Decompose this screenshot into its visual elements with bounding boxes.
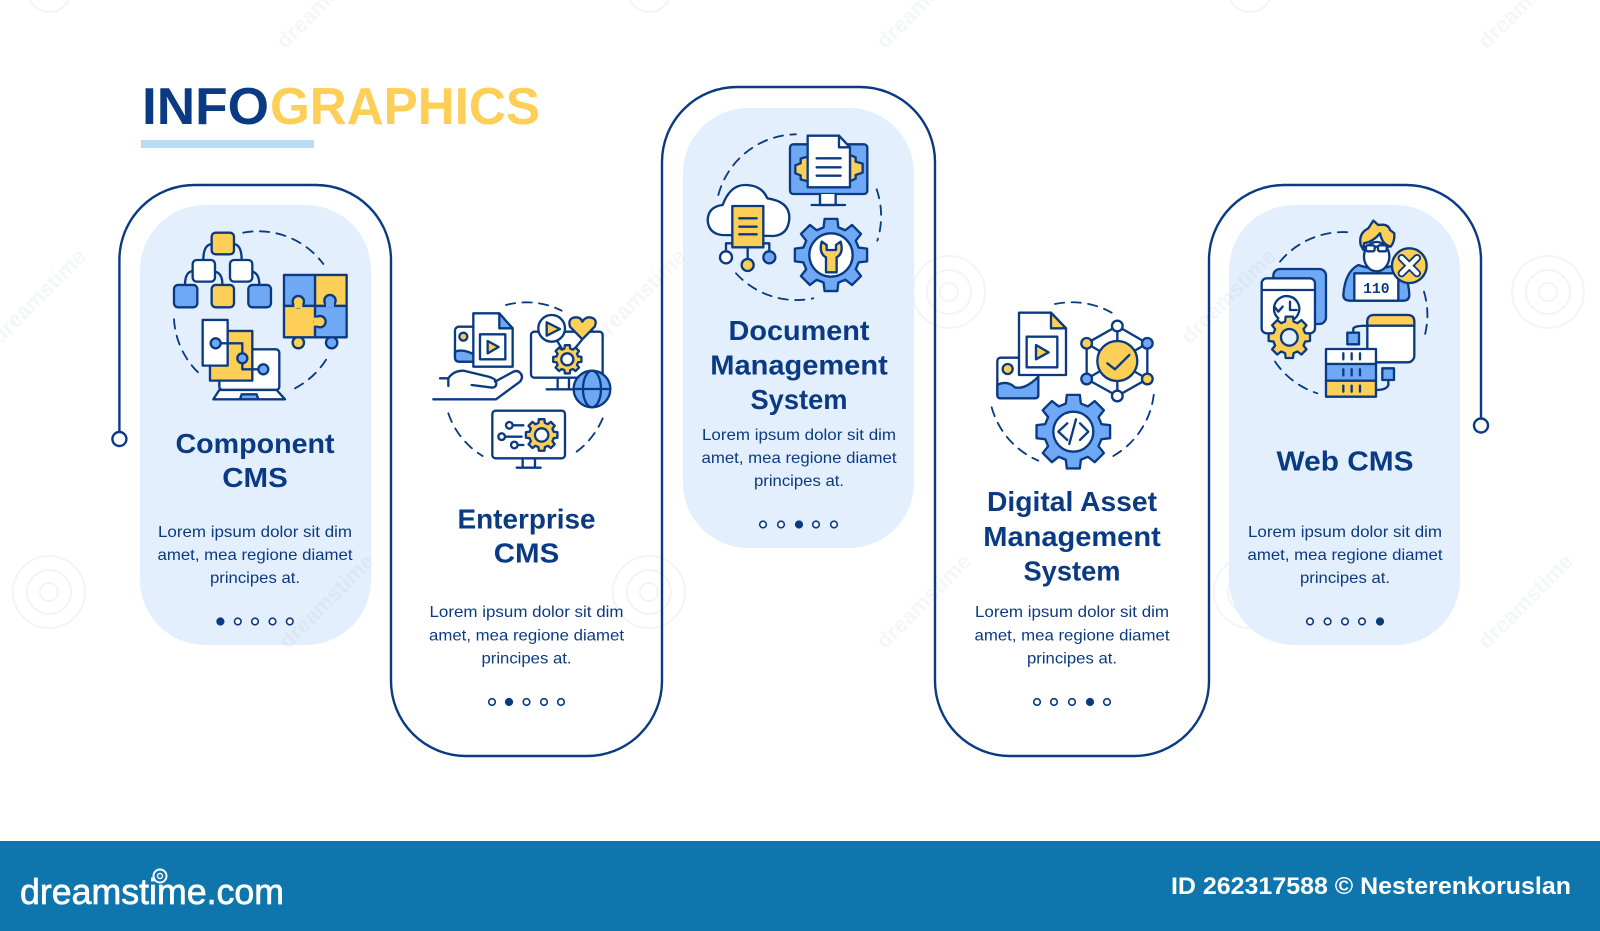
heading: Enterprise CMS (458, 504, 596, 569)
pagination dots: step 1 (217, 618, 293, 625)
panel: document background (683, 108, 914, 548)
watermark text (0, 0, 1578, 654)
text: web description: Lorem ipsum dolor sit dim (1248, 524, 1442, 541)
watermark text: dreamstime (1176, 244, 1281, 349)
title: INFO (142, 78, 269, 136)
icon: document management (708, 134, 881, 300)
heading: Document Management System: Document (728, 315, 870, 346)
text: component description (158, 524, 353, 587)
watermark text: dreamstime (1473, 549, 1578, 654)
text: web description: principes at. (1300, 570, 1390, 587)
text: document description: principes at. (754, 473, 844, 490)
text: digital asset description: amet, mea regione diamet (974, 628, 1170, 644)
watermark text: dreamstime (274, 549, 379, 654)
watermark spirals (13, 0, 1584, 628)
title underline (141, 140, 314, 148)
heading: Enterprise CMS: CMS (494, 538, 559, 569)
panel: component background (140, 205, 371, 645)
text: digital asset description: principes at. (1027, 650, 1117, 668)
heading: Digital Asset Management System (983, 486, 1161, 587)
text: digital asset description (974, 604, 1170, 668)
text: enterprise description: principes at. (482, 650, 572, 668)
text: digital asset description: Lorem ipsum dolor sit dim (975, 604, 1169, 621)
footer logo: dreamstime.com (20, 871, 284, 912)
pagination dots: step 4 (1034, 699, 1110, 705)
pagination dots: step 5 (1307, 618, 1383, 625)
heading: Digital Asset Management System: Digital Asset (987, 486, 1157, 517)
panel: web background (1229, 205, 1460, 645)
text: document description (702, 427, 897, 490)
footer credit: ID 262317588 © Nesterenkoruslan (1171, 873, 1571, 900)
text: document description: Lorem ipsum dolor sit dim (702, 427, 896, 444)
text: document description: amet, mea regione diamet (702, 450, 897, 467)
heading: Enterprise CMS: Enterprise (458, 504, 596, 535)
pagination dots: step 3 (760, 521, 837, 528)
heading: Component CMS (176, 428, 334, 493)
text: enterprise description: Lorem ipsum dolor sit dim (430, 604, 624, 621)
heading: Document Management System: Management (710, 350, 888, 380)
watermark text: dreamstime (586, 244, 691, 349)
text: component description: principes at. (210, 570, 300, 587)
title: GRAPHICS (270, 78, 540, 136)
icon: web CMS: 110 (1363, 282, 1390, 298)
heading: Component CMS: Component (176, 428, 334, 459)
text: web description (1248, 524, 1443, 587)
heading: Web CMS: Web CMS (1276, 445, 1414, 476)
text: component description: Lorem ipsum dolor sit dim (158, 524, 352, 541)
heading: Document Management System: System (750, 384, 848, 415)
heading: Component CMS: CMS (222, 462, 288, 493)
pagination dots: step 2 (489, 699, 564, 705)
heading: Digital Asset Management System: System (1024, 556, 1120, 587)
title (142, 78, 540, 136)
continuous outline connecting panels (112, 87, 1488, 756)
text: component description: amet, mea regione diamet (158, 547, 353, 564)
footer band (0, 841, 1600, 931)
icon: enterprise CMS (433, 302, 610, 468)
heading: Document Management System (710, 315, 888, 415)
icon: digital asset management (992, 302, 1154, 468)
text: web description: amet, mea regione diamet (1248, 547, 1443, 564)
text: enterprise description (429, 604, 625, 668)
heading: Digital Asset Management System: Management (983, 521, 1161, 552)
icon: component CMS (174, 231, 347, 399)
watermark text: dreamstime (871, 549, 976, 654)
icon: web CMS (1262, 221, 1427, 397)
text: enterprise description: amet, mea regione diamet (429, 628, 625, 644)
